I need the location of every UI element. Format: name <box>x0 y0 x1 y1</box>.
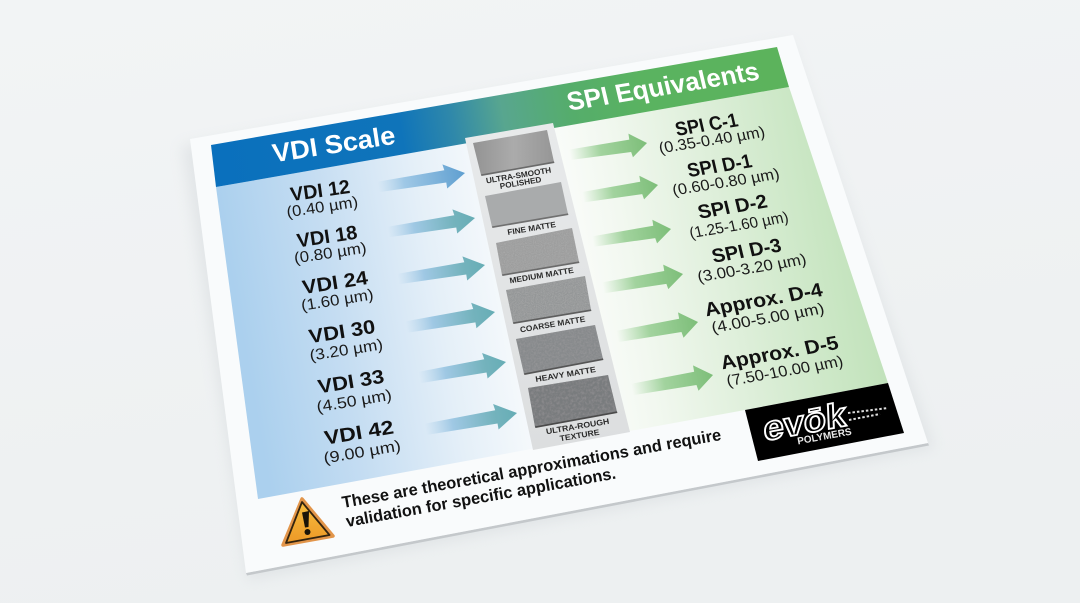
SPI D-1: (0.60-0.80 µm) <box>671 166 781 199</box>
Approx. D-5: (7.50-10.00 µm) <box>725 353 845 390</box>
arrow 1 <box>568 131 649 166</box>
SPI D-3: SPI D-3 <box>710 235 784 268</box>
SPI D-1 <box>671 150 781 199</box>
label: ultra-smooth polished: ULTRA-SMOOTH <box>485 166 552 185</box>
swatch: medium matte <box>496 228 579 276</box>
arrows: texture to SPI <box>568 131 715 402</box>
panel: VDI values <box>285 176 402 467</box>
VDI 12: (0.40 µm) <box>285 194 359 221</box>
VDI 33: (4.50 µm) <box>315 387 393 416</box>
arrow 4 <box>404 299 497 340</box>
VDI 30: (3.20 µm) <box>308 336 384 365</box>
SPI C-1 <box>657 109 767 157</box>
arrows: VDI to texture <box>376 161 519 442</box>
SPI D-3: (3.00-3.20 µm) <box>696 251 808 286</box>
logo wordmark: evōk <box>763 395 848 449</box>
swatch: ultra-rough texture <box>528 375 617 428</box>
SPI D-2: (1.25-1.60 µm) <box>688 209 790 242</box>
SPI D-2: SPI D-2 <box>696 191 770 224</box>
SPI D-3 <box>696 235 808 286</box>
VDI 12: VDI 12 <box>289 176 352 206</box>
VDI 42 <box>322 416 402 467</box>
card face <box>190 35 928 573</box>
VDI 30: VDI 30 <box>307 316 377 348</box>
label: ultra-rough texture: TEXTURE <box>559 428 601 443</box>
SPI D-2 <box>688 191 790 242</box>
VDI 30 <box>307 316 384 365</box>
Approx. D-5: Approx. D-5 <box>718 332 841 374</box>
arrow 4 <box>601 262 685 300</box>
gradient panel <box>216 87 888 499</box>
card <box>190 35 929 576</box>
label: fine matte: FINE MATTE <box>507 220 557 237</box>
SPI D-1: SPI D-1 <box>685 150 754 182</box>
VDI 18 <box>293 222 368 267</box>
VDI 12 <box>285 176 359 221</box>
SPI C-1: (0.35-0.40 µm) <box>657 124 767 157</box>
swatch: coarse matte <box>506 276 591 324</box>
swatch: heavy matte <box>516 325 603 375</box>
arrow 3 <box>396 253 487 291</box>
arrow 2 <box>581 173 660 209</box>
strip background <box>465 123 630 450</box>
swatch: ultra-smooth polished <box>473 130 554 176</box>
VDI 18: (0.80 µm) <box>293 240 368 267</box>
VDI 24 <box>300 267 375 315</box>
logo subtitle: POLYMERS <box>797 427 853 447</box>
arrow 5 <box>417 349 508 390</box>
label: ultra-rough texture: ULTRA-ROUGH <box>545 417 610 436</box>
arrow 5 <box>615 309 700 349</box>
arrow 1 <box>376 161 467 199</box>
panel: SPI values <box>657 109 845 390</box>
arrow 2 <box>386 206 477 244</box>
Approx. D-4: (4.00-5.00 µm) <box>710 300 826 337</box>
header band <box>211 47 789 187</box>
VDI 33: VDI 33 <box>316 366 386 398</box>
arrow 3 <box>591 217 673 253</box>
VDI 24: VDI 24 <box>301 267 370 299</box>
warning note: These are theoretical approximations and require <box>341 426 723 512</box>
swatch: fine matte <box>485 182 568 228</box>
panel: texture strip <box>465 123 630 450</box>
Approx. D-4 <box>702 279 826 337</box>
card shadow <box>182 42 934 580</box>
label: ultra-smooth polished: POLISHED <box>499 175 542 191</box>
SPI C-1: SPI C-1 <box>673 109 740 141</box>
VDI 42: VDI 42 <box>323 416 396 450</box>
arrow 6 <box>423 400 519 442</box>
icon: warning triangle <box>283 499 333 545</box>
heading: VDI Scale: VDI Scale <box>270 120 397 168</box>
label: heavy matte: HEAVY MATTE <box>535 365 597 384</box>
arrow 6 <box>630 362 715 402</box>
heading: SPI Equivalents: SPI Equivalents <box>564 56 762 117</box>
warning note: validation for specific applications. <box>345 465 617 531</box>
label: medium matte: MEDIUM MATTE <box>509 266 575 285</box>
VDI 24: (1.60 µm) <box>300 286 375 315</box>
label: ultra-rough texture <box>545 417 610 443</box>
logo: evok polymers <box>745 383 904 461</box>
Approx. D-4: Approx. D-4 <box>702 279 825 321</box>
VDI 42: (9.00 µm) <box>322 438 402 467</box>
label: coarse matte: COARSE MATTE <box>519 315 587 334</box>
VDI 33 <box>315 366 393 416</box>
VDI 18: VDI 18 <box>295 222 359 252</box>
card edge <box>246 443 929 576</box>
Approx. D-5 <box>718 332 845 390</box>
logo ornament <box>848 408 888 420</box>
